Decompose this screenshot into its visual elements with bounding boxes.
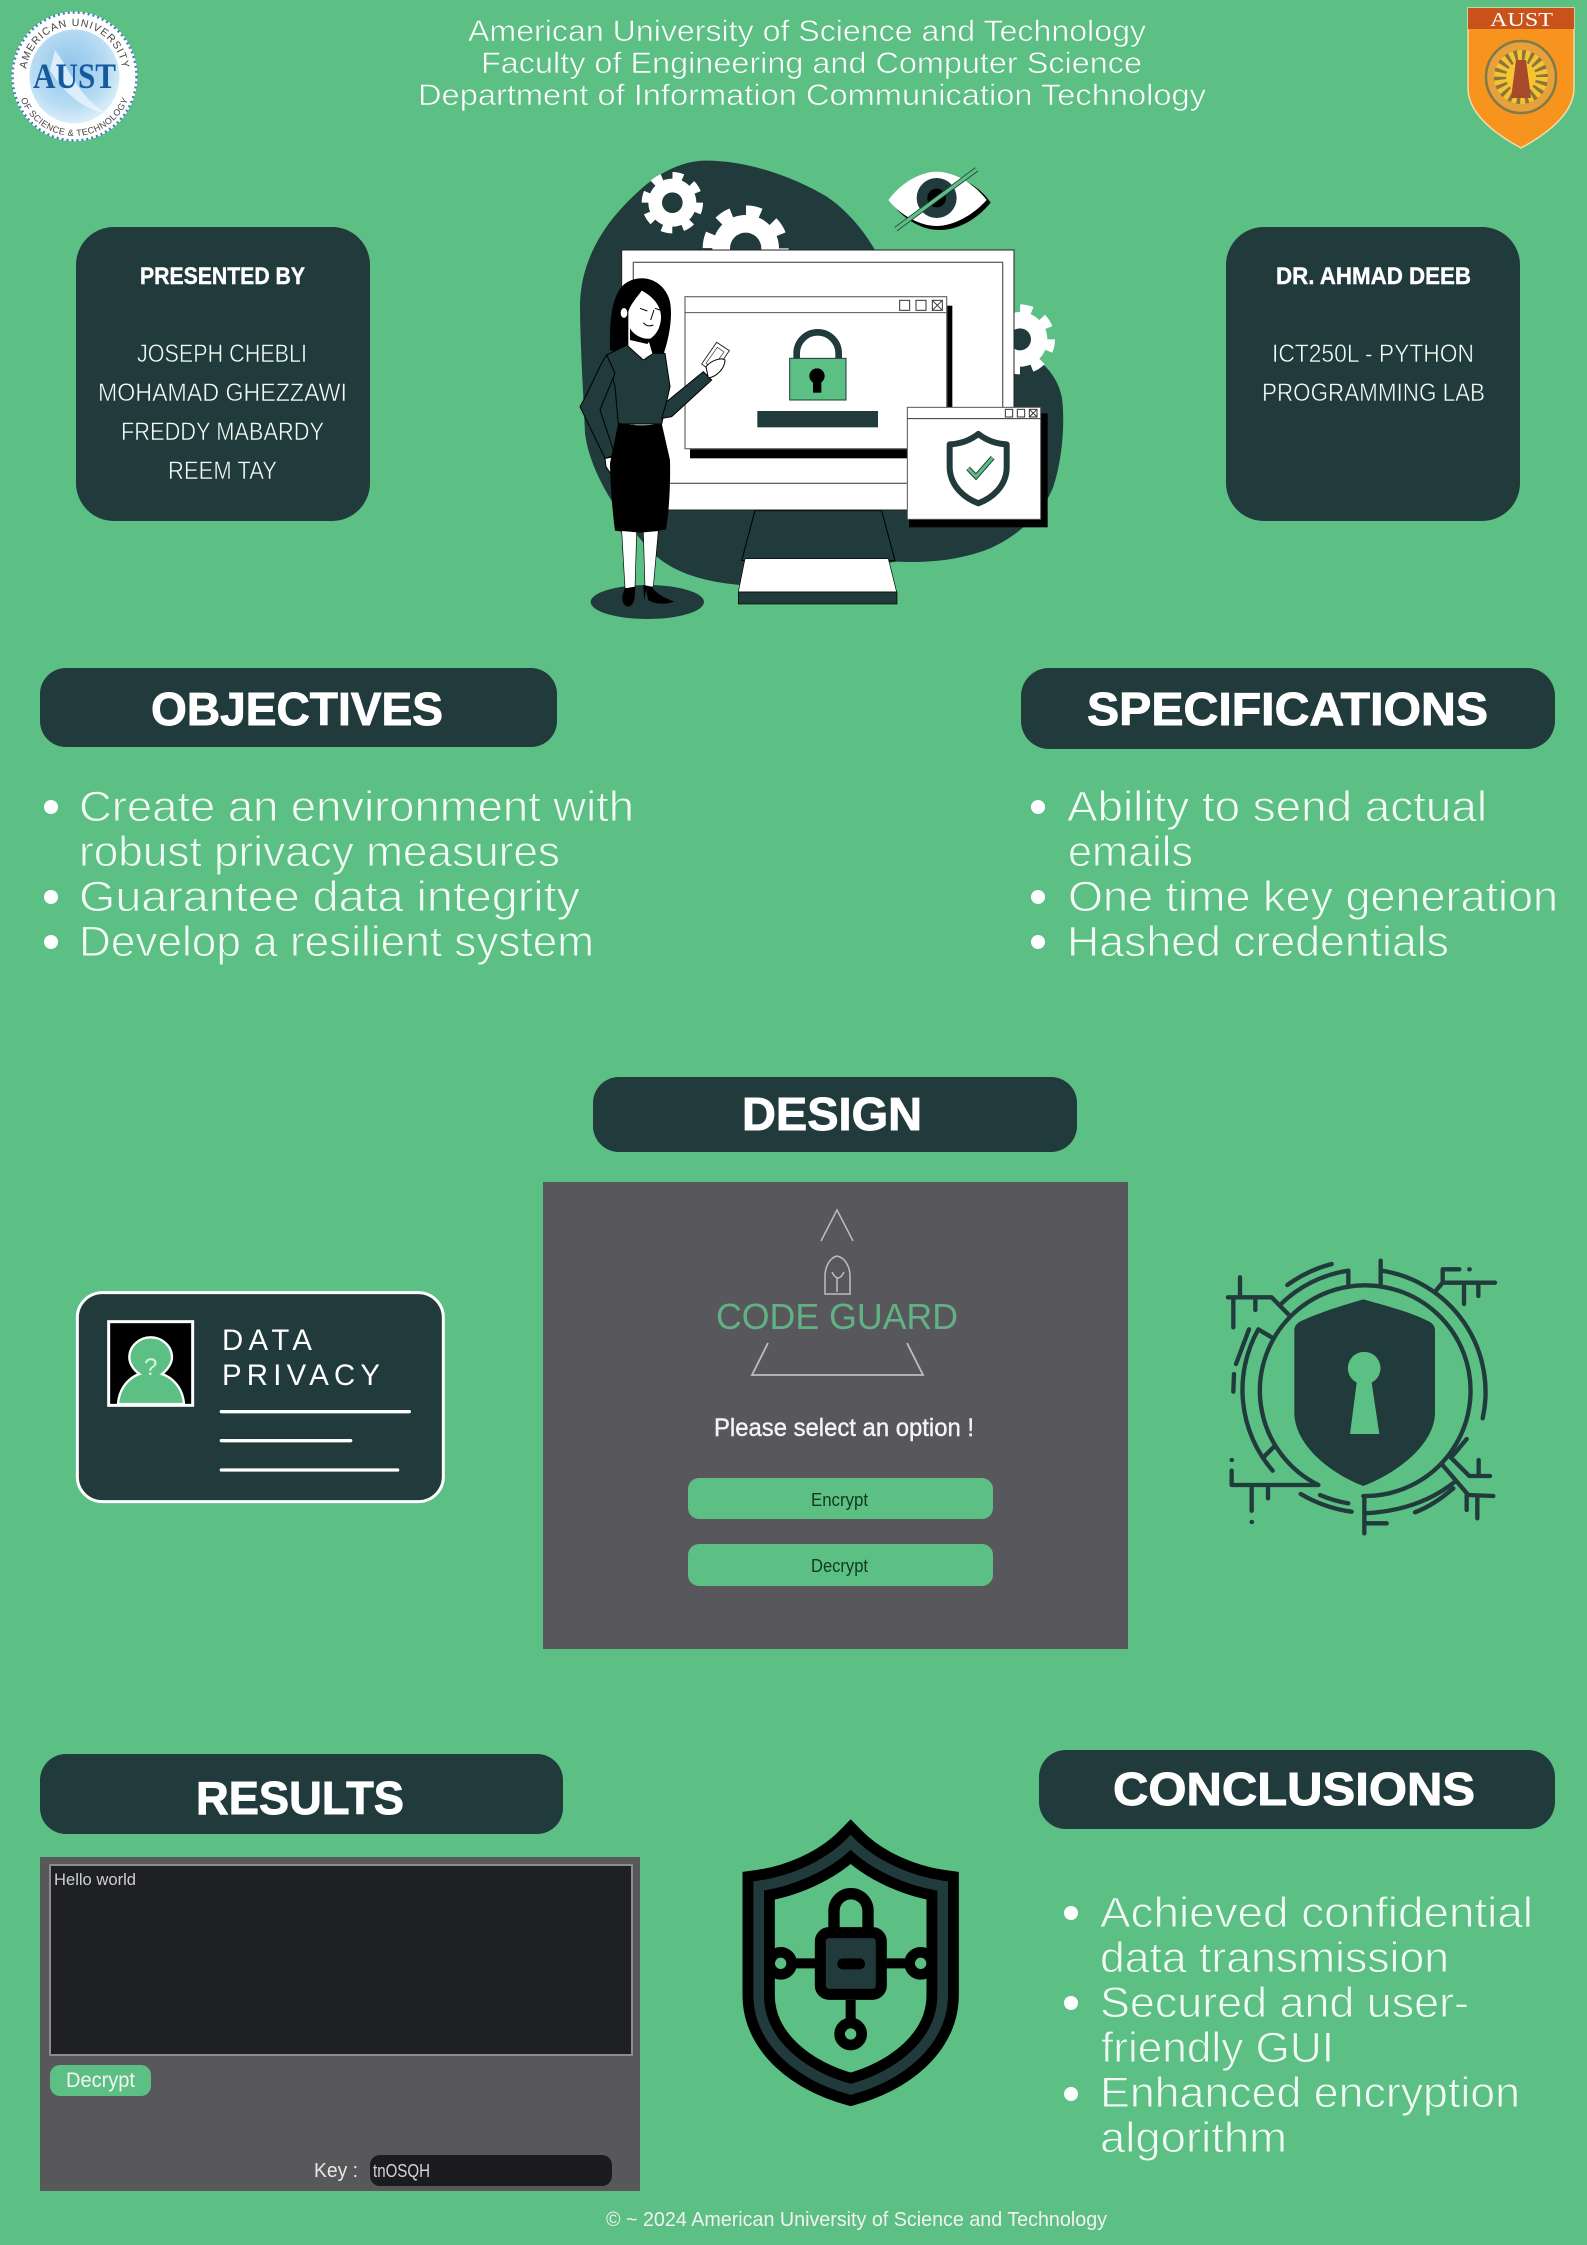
- button: encrypt: Encrypt: [811, 1490, 868, 1510]
- logo: code guard: CODE GUARD: [716, 1296, 958, 1337]
- title block: Faculty of Engineering and Computer Science: [481, 47, 1142, 80]
- output text box: [50, 1865, 632, 2055]
- heading: conclusions: [1039, 1750, 1555, 1829]
- woman: [580, 278, 729, 607]
- logo: AUST round seal: OF SCIENCE & TECHNOLOGY: [22, 97, 128, 136]
- illustration: woman presenting secure computer: [580, 161, 1063, 619]
- button: decrypt: [688, 1544, 993, 1586]
- list: conclusions: friendly GUI: [1101, 2024, 1334, 2072]
- key field: Key :: [314, 2160, 358, 2182]
- heading: specifications: [1021, 668, 1555, 749]
- text: course name: [1262, 340, 1485, 407]
- eye with slash: [888, 169, 991, 230]
- logo: AUST shield crest: [1468, 8, 1574, 148]
- key field: [314, 2155, 612, 2186]
- card text: [222, 1324, 380, 1392]
- lock window: [685, 297, 952, 458]
- shield window: [907, 407, 1048, 527]
- screenshot: code guard menu: [543, 1182, 1128, 1649]
- photo placeholder: ?: [144, 1354, 157, 1381]
- card text: PRIVACY: [222, 1359, 380, 1392]
- card lines: [221, 1412, 409, 1470]
- panel: objectives: [40, 668, 634, 966]
- photo placeholder: [109, 1322, 193, 1405]
- list: specifications: Ability to send actual: [1067, 783, 1487, 831]
- heading: results: [40, 1754, 563, 1834]
- icon: circuit shield keyhole: [1228, 1261, 1495, 1533]
- blob background: [580, 161, 1063, 585]
- logo: code guard: [716, 1210, 958, 1375]
- list: conclusions: Achieved confidential: [1100, 1889, 1533, 1937]
- list: specifications: emails: [1068, 828, 1193, 876]
- list: conclusions: [1064, 1889, 1533, 2162]
- list: objectives: Guarantee data integrity: [79, 873, 581, 921]
- logo: AUST shield crest: AUST: [1490, 9, 1553, 31]
- button: decrypt: [50, 2065, 151, 2096]
- button: encrypt: [688, 1478, 993, 1519]
- list: conclusions: Enhanced encryption: [1100, 2069, 1520, 2117]
- button: decrypt: Decrypt: [66, 2069, 135, 2092]
- output text box: Hello world: [54, 1870, 136, 1889]
- panel: instructor and course: [1226, 227, 1520, 521]
- list: conclusions: data transmission: [1100, 1934, 1449, 1982]
- card text: DATA: [222, 1324, 312, 1357]
- prompt text: Please select an option !: [714, 1414, 974, 1442]
- text: course name: ICT250L - PYTHON: [1272, 340, 1474, 368]
- heading: objectives: [40, 668, 557, 747]
- panel: presented by: [76, 227, 370, 521]
- text: team members: [98, 340, 347, 485]
- heading: objectives: OBJECTIVES: [151, 683, 443, 735]
- title block: Department of Information Communication Technology: [418, 79, 1206, 112]
- icon: shield with padlock: [759, 1842, 943, 2089]
- list: objectives: Create an environment with: [79, 783, 634, 831]
- heading: specifications: SPECIFICATIONS: [1087, 683, 1488, 735]
- button: decrypt: Decrypt: [811, 1556, 868, 1576]
- title block: [418, 15, 1206, 112]
- monitor stand: [742, 511, 895, 561]
- heading: design: [593, 1077, 1077, 1152]
- text: team members: MOHAMAD GHEZZAWI: [98, 379, 347, 407]
- heading: instructor name: DR. AHMAD DEEB: [1276, 263, 1471, 290]
- list: conclusions: algorithm: [1100, 2114, 1287, 2162]
- text: team members: REEM TAY: [168, 457, 277, 485]
- screenshot: decrypt result: [40, 1857, 640, 2191]
- list: objectives: [44, 783, 634, 966]
- logo: AUST round seal: AMERICAN UNIVERSITY: [20, 18, 130, 69]
- text: team members: FREDDY MABARDY: [121, 418, 324, 446]
- list: objectives: robust privacy measures: [79, 828, 560, 876]
- gears: [646, 176, 1051, 370]
- key field: tnOSQH: [373, 2161, 430, 2181]
- footer copyright: © ~ 2024 American University of Science and Technology: [606, 2209, 1107, 2231]
- title block: American University of Science and Technology: [468, 15, 1146, 48]
- logo: AUST round seal: [11, 11, 138, 142]
- logo: AUST round seal: AUST: [33, 56, 116, 96]
- icon: data privacy card: [77, 1293, 443, 1502]
- heading: conclusions: CONCLUSIONS: [1113, 1763, 1475, 1815]
- list: specifications: [1031, 783, 1558, 966]
- heading: design: DESIGN: [742, 1088, 922, 1140]
- monitor: [622, 250, 1014, 510]
- heading: presented by: PRESENTED BY: [140, 263, 305, 290]
- panel: specifications: [1021, 668, 1558, 966]
- list: specifications: Hashed credentials: [1067, 918, 1449, 966]
- ground shadow: [591, 585, 704, 619]
- heading: results: RESULTS: [196, 1772, 404, 1824]
- list: objectives: Develop a resilient system: [79, 918, 594, 966]
- list: conclusions: Secured and user-: [1100, 1979, 1469, 2027]
- list: specifications: One time key generation: [1068, 873, 1558, 921]
- text: course name: PROGRAMMING LAB: [1262, 379, 1485, 407]
- text: team members: JOSEPH CHEBLI: [137, 340, 307, 368]
